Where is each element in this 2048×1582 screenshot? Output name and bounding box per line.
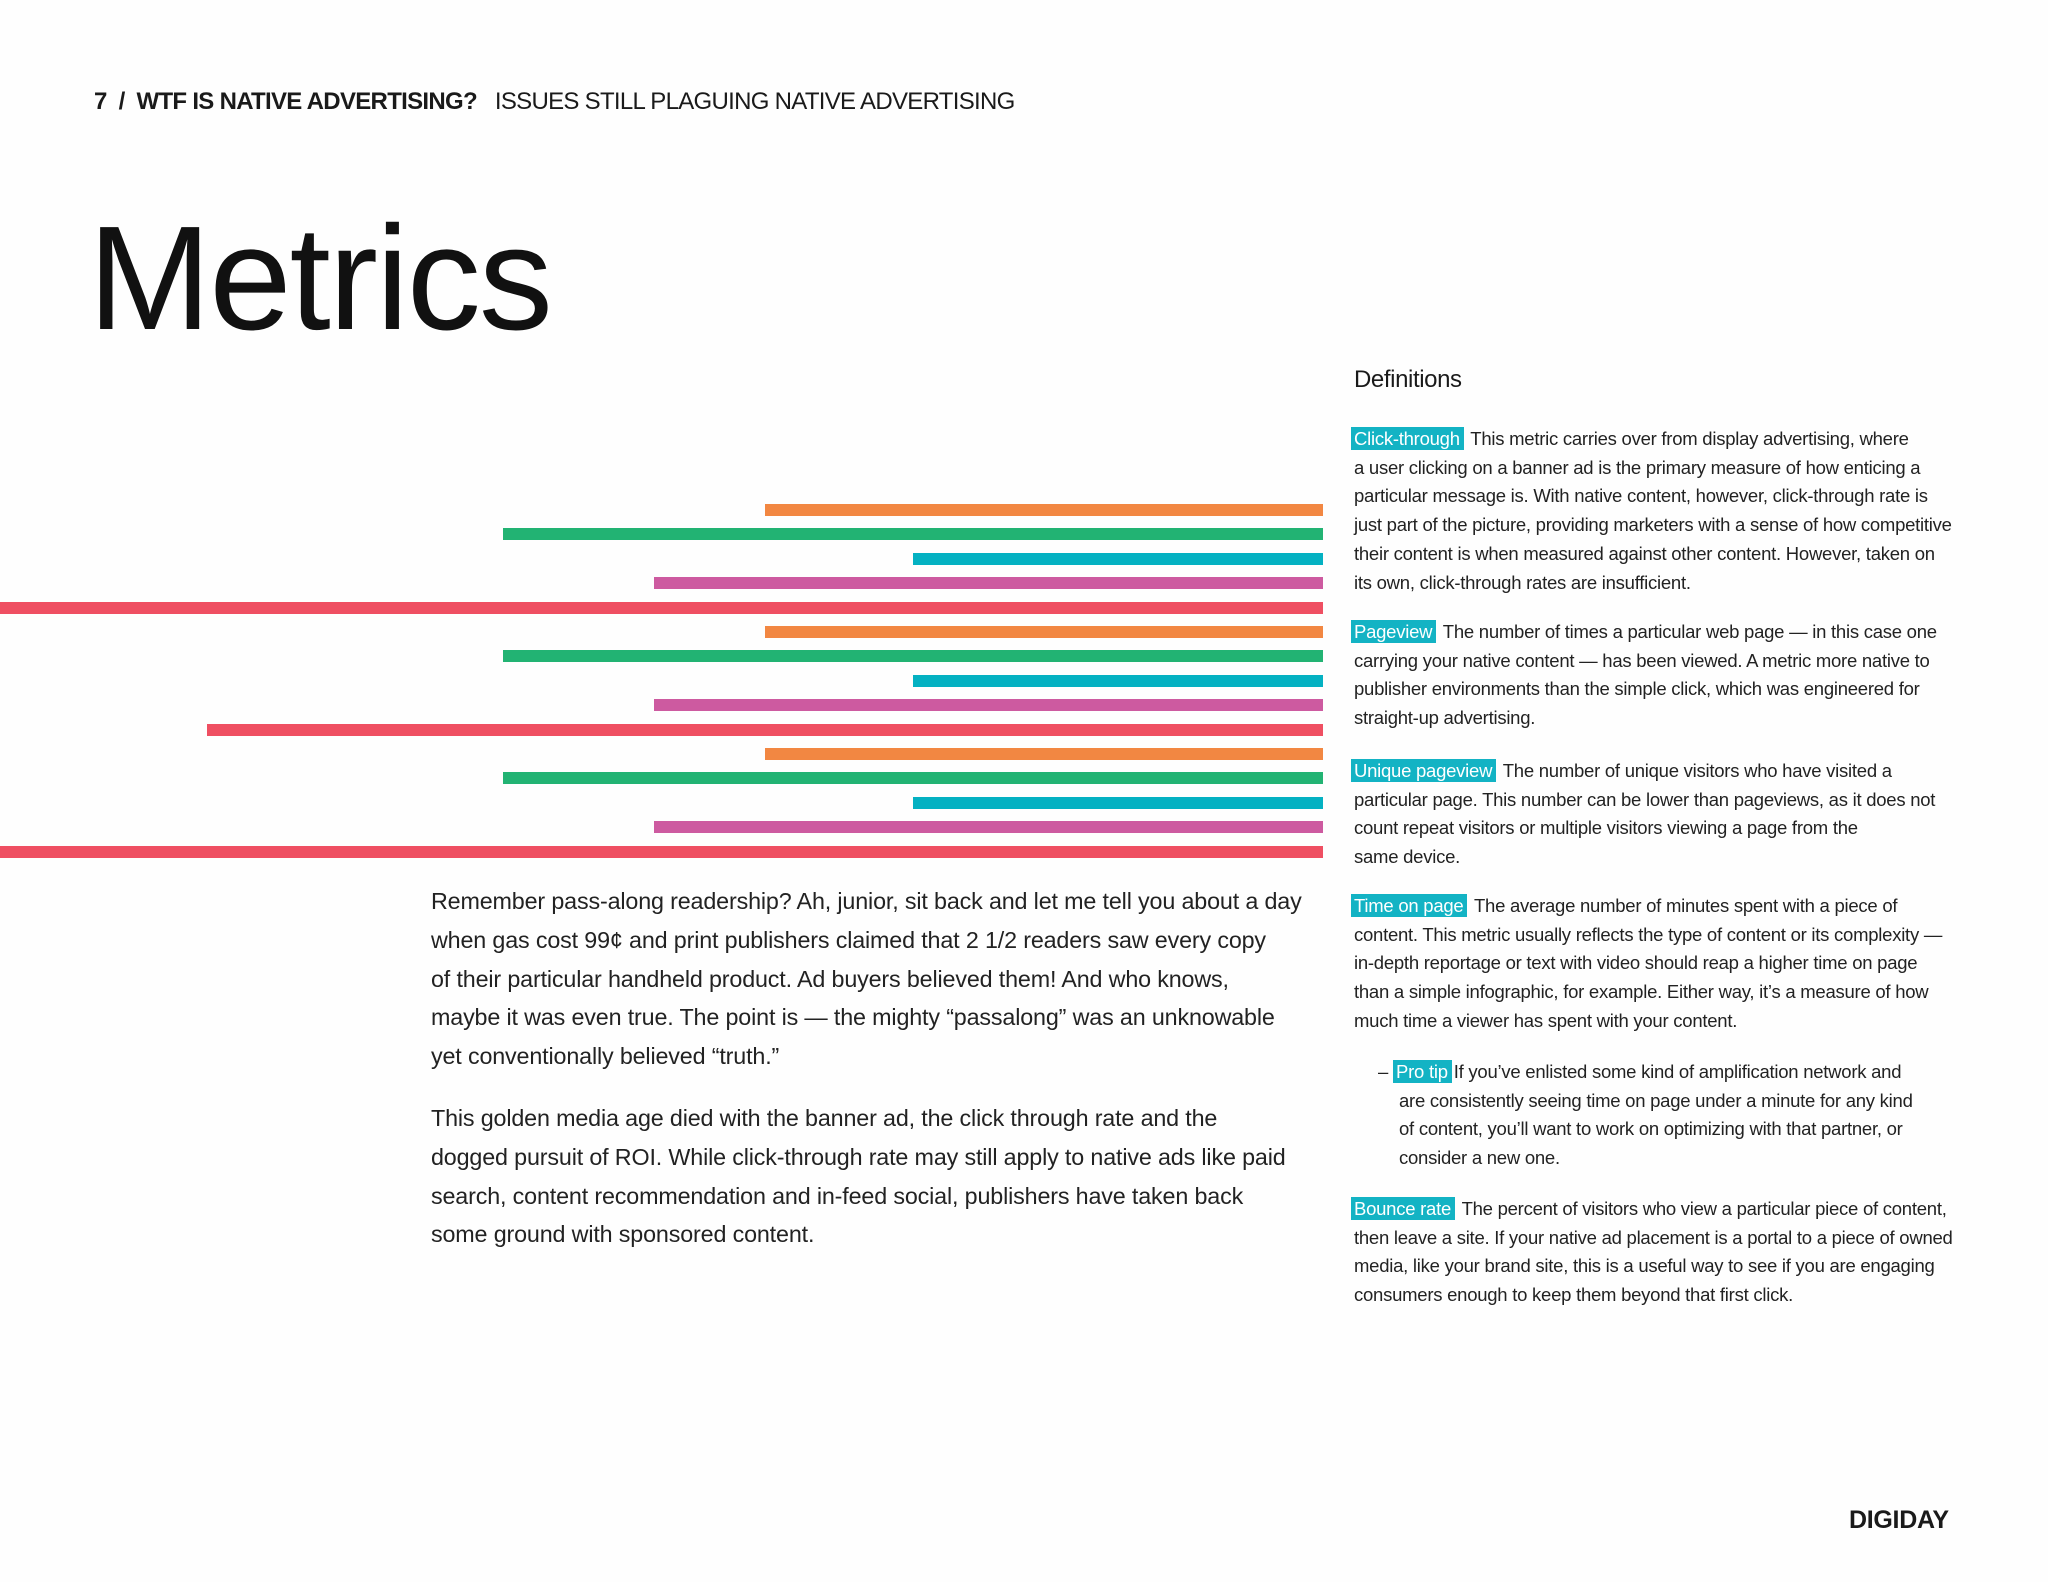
- body paragraph 1: maybe it was even true. The point is — the mighty “passalong” was an unknowable: [431, 1004, 1275, 1030]
- definition: bounce rate: then leave a site. If your native ad placement is a portal to a piece of owned: [1354, 1227, 1953, 1248]
- definition: bounce rate: consumers enough to keep them beyond that first click.: [1354, 1284, 1793, 1305]
- definition: unique pageview: count repeat visitors or multiple visitors viewing a page from the: [1354, 817, 1858, 838]
- definition: pageview: Pageview The number of times a particular web page — in this case one: [1354, 621, 1937, 642]
- body paragraph 2: some ground with sponsored content.: [431, 1221, 814, 1247]
- body paragraph 2: search, content recommendation and in-feed social, publishers have taken back: [431, 1183, 1243, 1209]
- definition: time on page: Time on page The average number of minutes spent with a piece of: [1354, 895, 1897, 916]
- definition: bounce rate: [1351, 1197, 1953, 1305]
- definition: unique pageview: same device.: [1354, 846, 1460, 867]
- definition: time on page: much time a viewer has spent with your content.: [1354, 1010, 1737, 1031]
- body paragraph 2: [431, 1105, 1286, 1247]
- definition: click-through: a user clicking on a banner ad is the primary measure of how enticing a: [1354, 457, 1920, 478]
- body paragraph 1: yet conventionally believed “truth.”: [431, 1043, 779, 1069]
- definition: time on page: than a simple infographic, for example. Either way, it’s a measure of how: [1354, 981, 1928, 1002]
- body paragraph 1: Remember pass-along readership? Ah, junior, sit back and let me tell you about a day: [431, 888, 1302, 914]
- definition: click-through: Click-through This metric carries over from display advertising, where: [1354, 428, 1909, 449]
- definition: pageview: carrying your native content — has been viewed. A metric more native to: [1354, 650, 1930, 671]
- body paragraph 1: of their particular handheld product. Ad buyers believed them! And who knows,: [431, 966, 1229, 992]
- bar chart decoration: [0, 504, 1323, 858]
- definition: click-through: its own, click-through rates are insufficient.: [1354, 572, 1691, 593]
- pro tip: consider a new one.: [1399, 1147, 1560, 1168]
- title: Metrics: [88, 196, 551, 361]
- definition: unique pageview: [1351, 759, 1936, 867]
- definition: pageview: straight-up advertising.: [1354, 707, 1535, 728]
- definition: time on page: in-depth reportage or text with video should reap a higher time on page: [1354, 952, 1917, 973]
- definition: bounce rate: Bounce rate The percent of visitors who view a particular piece of content,: [1354, 1198, 1947, 1219]
- definition: click-through: particular message is. With native content, however, click-through rate is: [1354, 485, 1928, 506]
- definition: click-through: just part of the picture, providing marketers with a sense of how competitive: [1354, 514, 1952, 535]
- pro tip: – Pro tip If you’ve enlisted some kind of amplification network and: [1378, 1061, 1901, 1082]
- definition: pageview: [1351, 620, 1937, 728]
- definition: unique pageview: particular page. This number can be lower than pageviews, as it does not: [1354, 789, 1935, 810]
- definition: bounce rate: media, like your brand site, this is a useful way to see if you are engaging: [1354, 1255, 1935, 1276]
- header: 7 / WTF IS NATIVE ADVERTISING? ISSUES STILL PLAGUING NATIVE ADVERTISING: [94, 88, 1015, 115]
- body paragraph 2: This golden media age died with the banner ad, the click through rate and the: [431, 1105, 1217, 1131]
- body paragraph 2: dogged pursuit of ROI. While click-through rate may still apply to native ads like paid: [431, 1144, 1286, 1170]
- definitions heading: Definitions: [1354, 366, 1462, 393]
- body paragraph 1: when gas cost 99¢ and print publishers claimed that 2 1/2 readers saw every copy: [431, 927, 1266, 953]
- logo: DIGIDAY: DIGIDAY: [1849, 1506, 1949, 1534]
- definition: click-through: [1351, 427, 1952, 593]
- pro tip: of content, you’ll want to work on optimizing with that partner, or: [1399, 1118, 1903, 1139]
- definition: click-through: their content is when measured against other content. However, taken on: [1354, 543, 1935, 564]
- definition: pageview: publisher environments than the simple click, which was engineered for: [1354, 678, 1920, 699]
- pro tip: are consistently seeing time on page under a minute for any kind: [1399, 1090, 1913, 1111]
- body paragraph 1: [431, 888, 1302, 1069]
- definition: unique pageview: Unique pageview The number of unique visitors who have visited a: [1354, 760, 1892, 781]
- definition: time on page: content. This metric usually reflects the type of content or its complexity —: [1354, 924, 1942, 945]
- definition: time on page: [1351, 894, 1942, 1031]
- pro tip: [1378, 1060, 1913, 1168]
